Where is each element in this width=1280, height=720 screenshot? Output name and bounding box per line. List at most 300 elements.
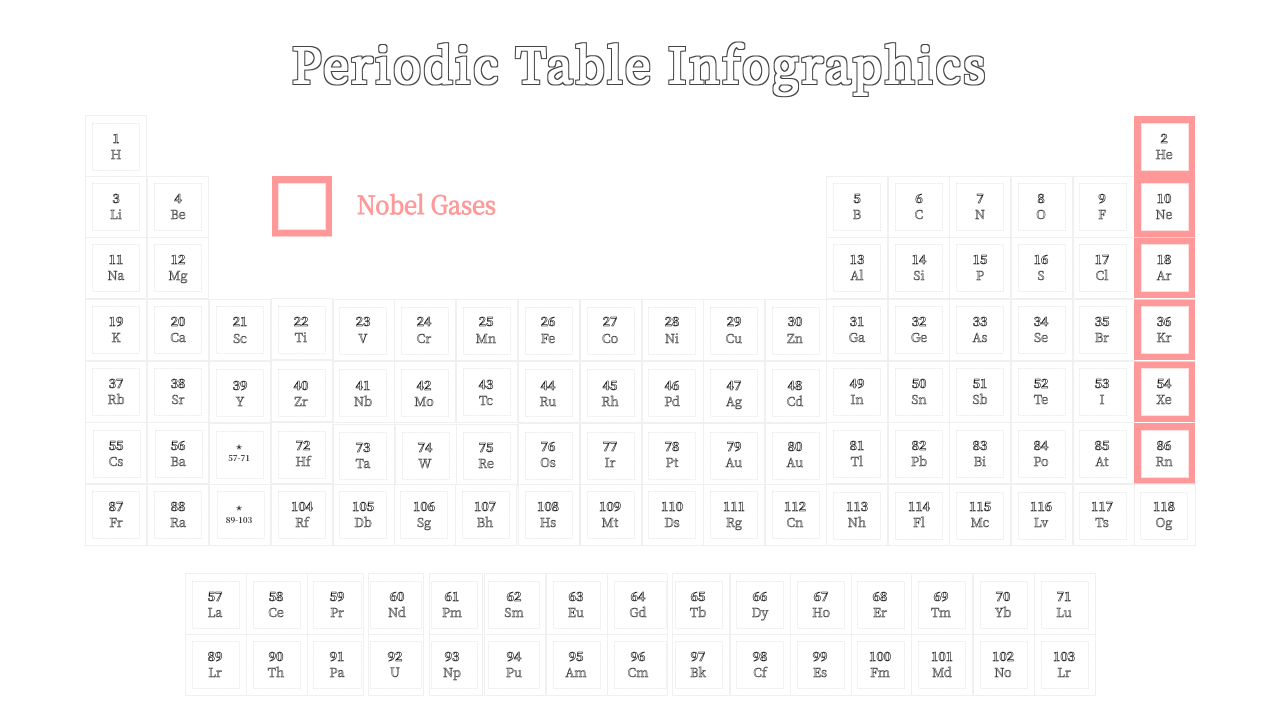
element: Th: Th xyxy=(268,663,284,681)
element: Eu xyxy=(546,574,608,634)
element: Sb: Sb xyxy=(973,390,988,408)
element: He: He xyxy=(1155,145,1173,163)
element: Yb: 70 xyxy=(996,587,1010,605)
element: W: W xyxy=(418,454,432,472)
element: Ga: 31 xyxy=(850,312,864,330)
element: Pa: 91 xyxy=(330,647,344,665)
element: Pb: Pb xyxy=(911,452,927,470)
actinide placeholder cell: * xyxy=(237,502,242,517)
element: Pm xyxy=(430,574,482,634)
element: K: K xyxy=(111,328,121,346)
element: H: H xyxy=(111,145,121,163)
element: Er: Er xyxy=(873,603,887,621)
element: Cr: Cr xyxy=(417,329,431,347)
element: I: 53 xyxy=(1095,374,1109,392)
element: F: F xyxy=(1098,205,1106,223)
element: Zr xyxy=(272,360,332,422)
element: Ts: 117 xyxy=(1091,497,1113,515)
element: Ce: Ce xyxy=(268,603,284,621)
element: Gd xyxy=(608,574,668,634)
element: F: 9 xyxy=(1098,189,1106,207)
element: Md: 101 xyxy=(931,647,953,665)
element: Au (80) xyxy=(766,424,826,484)
element: Fe xyxy=(518,300,580,360)
element: As xyxy=(950,300,1010,360)
element: Bh: Bh xyxy=(477,513,493,531)
element: Y: Y xyxy=(236,392,245,410)
element: At xyxy=(1074,422,1134,484)
element: Br: Br xyxy=(1095,328,1109,346)
element: Xe: 54 xyxy=(1157,374,1172,392)
element: In: 49 xyxy=(850,374,864,392)
element: Db: 105 xyxy=(352,497,374,515)
element: Li: Li xyxy=(110,205,122,223)
element: Ir: Ir xyxy=(605,453,616,471)
element: Md: Md xyxy=(932,663,952,681)
element: No: No xyxy=(994,663,1012,681)
element: Ni: Ni xyxy=(665,329,679,347)
element: No: 102 xyxy=(992,647,1014,665)
element: Ti xyxy=(272,298,332,360)
element: Rg: Rg xyxy=(726,513,742,531)
element: Tb xyxy=(672,574,730,634)
element: Cs: 55 xyxy=(109,436,123,454)
legend: noble gases xyxy=(272,176,496,236)
element: B: 5 xyxy=(853,189,861,207)
element: Te xyxy=(1012,362,1072,422)
element: Rn: 86 xyxy=(1157,436,1171,454)
element: Ra: 88 xyxy=(171,497,185,515)
element: Cu: Cu xyxy=(726,329,742,347)
element: Pt: Pt xyxy=(666,453,679,471)
element: Sm: Sm xyxy=(504,603,524,621)
element: Os: Os xyxy=(540,453,556,471)
element: Te: 52 xyxy=(1034,374,1048,392)
element: Rf xyxy=(272,484,332,546)
element: Cf: 98 xyxy=(753,647,767,665)
element: Ti: Ti xyxy=(295,328,307,346)
element: Ra xyxy=(148,484,208,546)
element: Ag: Ag xyxy=(726,392,742,410)
element: Re: 75 xyxy=(479,438,493,456)
element: Ts: Ts xyxy=(1095,513,1109,531)
element: Es: 99 xyxy=(813,647,827,665)
element: Ge: 32 xyxy=(912,312,926,330)
element: Cn: 112 xyxy=(784,497,806,515)
element: Cs xyxy=(86,422,146,484)
element: Mg xyxy=(148,238,208,298)
element: Nh xyxy=(826,484,888,546)
element: Te: Te xyxy=(1034,390,1048,408)
element: W: 74 xyxy=(418,438,433,456)
element: Lu xyxy=(1034,574,1096,634)
element: F xyxy=(1074,176,1134,238)
element: Mt: 109 xyxy=(599,497,621,515)
element: Na: Na xyxy=(108,266,124,284)
element: Ru: 44 xyxy=(541,376,556,394)
element: Pt: 78 xyxy=(665,437,679,455)
element: Na xyxy=(86,238,146,298)
element: Br: 35 xyxy=(1095,312,1109,330)
element: Lu: 71 xyxy=(1057,587,1071,605)
element: Pr xyxy=(308,574,364,634)
element: Np: 93 xyxy=(445,647,459,665)
element: Mo: 42 xyxy=(417,376,431,394)
element: Rh: Rh xyxy=(601,392,619,410)
element: Hf xyxy=(272,422,332,484)
element: Ar xyxy=(1134,238,1195,298)
element: Pb: 82 xyxy=(912,436,926,454)
element: Ne: 10 xyxy=(1157,189,1171,207)
element: Ru: Ru xyxy=(540,392,556,410)
element: Os: 76 xyxy=(541,437,555,455)
element: B xyxy=(826,176,888,238)
element: Fe: Fe xyxy=(541,329,555,347)
element: Cn xyxy=(766,484,826,546)
element: Cl: Cl xyxy=(1096,266,1108,284)
element: Cu: 29 xyxy=(727,312,741,330)
element: Pd: Pd xyxy=(664,392,680,410)
element: Xe: Xe xyxy=(1156,390,1172,408)
element: Am: 95 xyxy=(569,647,583,665)
element: Ts xyxy=(1074,484,1134,546)
element: Ar: Ar xyxy=(1157,266,1172,284)
element: Tl: 81 xyxy=(850,436,864,454)
element: Au xyxy=(704,424,764,484)
element: Au (80): Au xyxy=(787,453,803,471)
element: N xyxy=(950,176,1010,238)
element: Th: 90 xyxy=(269,647,283,665)
element: Lv: Lv xyxy=(1034,513,1048,531)
element: Hf: Hf xyxy=(295,452,312,470)
element: Sn: Sn xyxy=(911,390,927,408)
element: N: 7 xyxy=(976,189,984,207)
element: Fl: Fl xyxy=(913,513,925,531)
element: Ar: 18 xyxy=(1157,250,1171,268)
element: He xyxy=(1134,116,1195,176)
element: Ta: 73 xyxy=(356,438,370,456)
element: Sc: 21 xyxy=(233,312,247,330)
element: Fm: 100 xyxy=(869,647,891,665)
element: Si xyxy=(888,238,950,298)
element: Th xyxy=(246,634,308,696)
element: Tm: 69 xyxy=(934,587,948,605)
element: Hf: 72 xyxy=(296,436,310,454)
element: U: 92 xyxy=(388,647,402,665)
element: Mo: Mo xyxy=(414,392,434,410)
element: Pa xyxy=(308,634,364,696)
element: Re: Re xyxy=(478,454,494,472)
element: Hs: 108 xyxy=(537,497,559,515)
element: Tl: Tl xyxy=(851,452,863,470)
element: Cn: Cn xyxy=(787,513,803,531)
element: Fr: 87 xyxy=(109,497,123,515)
element: Sc: Sc xyxy=(233,329,247,347)
element: Rf: Rf xyxy=(295,513,310,531)
element: At: At xyxy=(1095,452,1109,470)
element: Cf: Cf xyxy=(753,663,768,681)
element: I xyxy=(1074,362,1134,422)
element: Cm xyxy=(608,634,668,696)
element: Co xyxy=(580,300,642,360)
element: Bi: 83 xyxy=(973,436,987,454)
element: Ge xyxy=(888,300,950,360)
element: Bk xyxy=(672,634,730,696)
element: Nh: 113 xyxy=(846,497,868,515)
element: Ds xyxy=(642,484,704,546)
element: S xyxy=(1012,238,1072,298)
element: Zn xyxy=(766,300,826,360)
element: Ti: 22 xyxy=(294,312,308,330)
element: Dy: Dy xyxy=(752,603,768,621)
element: Pm: 61 xyxy=(445,587,459,605)
element: Sr: 38 xyxy=(171,374,185,392)
element: Ir xyxy=(580,424,642,484)
element: Rg xyxy=(704,484,764,546)
element: Se: Se xyxy=(1034,328,1048,346)
element: Kr: Kr xyxy=(1157,328,1172,346)
element: La: 57 xyxy=(208,587,222,605)
element: Tm xyxy=(912,574,972,634)
element: K xyxy=(86,300,146,360)
element: Sr xyxy=(148,362,208,422)
element: Np: Np xyxy=(443,663,461,681)
element: Nb xyxy=(334,362,394,422)
element: Al: Al xyxy=(850,266,864,284)
element: Rg: 111 xyxy=(723,497,745,515)
element: Rf: 104 xyxy=(291,497,314,515)
element: C xyxy=(888,176,950,238)
element: Tb: 65 xyxy=(691,587,705,605)
element: Og xyxy=(1134,484,1196,546)
element: C: C xyxy=(915,205,923,223)
element: Tl xyxy=(826,422,888,484)
element: Ru xyxy=(518,362,580,422)
element: Pd xyxy=(642,362,704,422)
element: Al: 13 xyxy=(850,250,864,268)
element: Ce: 58 xyxy=(269,587,283,605)
element: Er: 68 xyxy=(873,587,887,605)
element: Eu: Eu xyxy=(568,603,584,621)
element: Rb: 37 xyxy=(109,374,123,392)
main periodic table xyxy=(86,116,1196,546)
element: Ga xyxy=(826,300,888,360)
element: Yb: Yb xyxy=(995,603,1011,621)
element: O xyxy=(1012,176,1072,238)
element: Fm: Fm xyxy=(870,663,890,681)
element: Pu: Pu xyxy=(506,663,522,681)
element: Ta xyxy=(334,424,394,486)
element: Gd: 64 xyxy=(631,587,646,605)
element: P xyxy=(950,238,1010,298)
element: Pu: 94 xyxy=(507,647,522,665)
element: Sc xyxy=(210,300,270,360)
element: P: P xyxy=(976,266,984,284)
element: Cs: Cs xyxy=(109,452,123,470)
element: S: S xyxy=(1037,266,1045,284)
element: Si: 14 xyxy=(912,250,927,268)
element: As: 33 xyxy=(973,312,987,330)
element: Ho xyxy=(790,574,852,634)
element: Fr xyxy=(86,484,146,546)
element: Rh: 45 xyxy=(603,376,617,394)
element: Cr: 24 xyxy=(417,312,432,330)
element: Lr xyxy=(1034,634,1096,696)
element: Ni: 28 xyxy=(665,312,679,330)
element: Co: Co xyxy=(602,329,618,347)
element: Po: Po xyxy=(1033,452,1049,470)
element: Be: 4 xyxy=(174,189,182,207)
element: Zr: Zr xyxy=(294,392,308,410)
element: Bh: 107 xyxy=(474,497,496,515)
element: No xyxy=(974,634,1034,696)
element: Se xyxy=(1012,300,1072,360)
legend label: Nobel Gases xyxy=(357,186,496,222)
element: Xe xyxy=(1134,362,1195,422)
element: Lv: 116 xyxy=(1030,497,1052,515)
element: B: B xyxy=(853,205,861,223)
title: Periodic Table Infographics xyxy=(292,28,988,97)
element: Cm: 96 xyxy=(631,647,645,665)
element: Ne: Ne xyxy=(1156,205,1172,223)
element: In: In xyxy=(850,390,864,408)
element: Y: 39 xyxy=(233,376,247,394)
element: Dy xyxy=(730,574,792,634)
element: Mg: 12 xyxy=(171,250,185,268)
element: Pm: Pm xyxy=(442,603,462,621)
element: Ca: 20 xyxy=(171,312,185,330)
element: Mc: Mc xyxy=(971,513,990,531)
element: Nh: Nh xyxy=(848,513,866,531)
element: Hs xyxy=(518,484,580,546)
element: Ca xyxy=(148,300,208,360)
element: Fl: 114 xyxy=(908,497,931,515)
element: Ho: Ho xyxy=(812,603,830,621)
element: Db xyxy=(334,484,394,546)
element: Ag xyxy=(704,362,764,422)
element: Mt: Mt xyxy=(602,513,619,531)
element: Re xyxy=(456,424,518,486)
element: V xyxy=(334,300,394,360)
legend swatch xyxy=(272,176,332,236)
element: S: 16 xyxy=(1034,250,1048,268)
element: Ac (89): Lr xyxy=(208,663,222,681)
element: Ne xyxy=(1134,176,1195,237)
element: Yb xyxy=(974,574,1034,634)
element: Li: 3 xyxy=(112,189,120,207)
element: Bk: 97 xyxy=(691,647,705,665)
element: Po: 84 xyxy=(1034,436,1049,454)
element: Fl xyxy=(888,484,950,546)
element: Mg: Mg xyxy=(168,266,188,284)
element: Mn: 25 xyxy=(479,312,493,330)
element: Sb: 51 xyxy=(973,374,987,392)
element: Np xyxy=(430,634,482,696)
element: C: 6 xyxy=(915,189,923,207)
element: Tc xyxy=(456,362,518,422)
element: Pu xyxy=(484,634,546,696)
element: La xyxy=(186,574,246,634)
element: Ho: 67 xyxy=(814,587,828,605)
element: Cu xyxy=(704,300,764,360)
element: La: La xyxy=(208,603,222,621)
element: Bk: Bk xyxy=(690,663,706,681)
element: Es xyxy=(790,634,852,696)
element: Cl: 17 xyxy=(1095,250,1109,268)
element: He: 2 xyxy=(1160,129,1168,147)
element: Sn: 50 xyxy=(912,374,926,392)
element: Au: 79 xyxy=(727,437,741,455)
element: Au (80): 80 xyxy=(788,437,802,455)
element: Rb xyxy=(86,362,146,422)
element: Ba: 56 xyxy=(171,436,185,454)
lanthanide and actinide table xyxy=(186,574,1096,696)
element: Fe: 26 xyxy=(541,312,555,330)
element: Mo xyxy=(394,362,456,422)
element: Fm xyxy=(852,634,912,696)
element: Sm: 62 xyxy=(507,587,521,605)
element: Ds: 110 xyxy=(661,497,683,515)
element: At: 85 xyxy=(1095,436,1109,454)
element: O: 8 xyxy=(1037,189,1045,207)
element: Ce xyxy=(246,574,308,634)
element: Nb: 41 xyxy=(356,376,370,394)
element: Cl xyxy=(1074,238,1134,298)
element: Ca: Ca xyxy=(170,328,186,346)
element: Os xyxy=(518,424,580,484)
element: Li xyxy=(86,176,146,238)
element: Sb xyxy=(950,362,1010,422)
element: Rn: Rn xyxy=(1155,452,1173,470)
element: Er xyxy=(852,574,912,634)
element: Au: Au xyxy=(726,453,742,471)
element: Nb: Nb xyxy=(354,392,372,410)
element: Fr: Fr xyxy=(109,513,123,531)
element: Nd: 60 xyxy=(390,587,404,605)
element: Ac (89) xyxy=(186,634,246,696)
element: Kr xyxy=(1134,300,1195,360)
element: Mn: Mn xyxy=(476,329,496,347)
element: H xyxy=(86,116,146,176)
element: Nd xyxy=(368,574,424,634)
element: Cd xyxy=(766,362,826,422)
element: Sn xyxy=(888,362,950,422)
element: Be xyxy=(148,176,208,238)
element: Cd: 48 xyxy=(788,376,802,394)
element: Mc: 115 xyxy=(969,497,991,515)
element: K: 19 xyxy=(109,312,123,330)
element: Db: Db xyxy=(354,513,372,531)
element: Rh xyxy=(580,362,642,422)
element: Tc: 43 xyxy=(479,375,493,393)
element: Mn xyxy=(456,300,518,360)
element: Bh xyxy=(456,484,516,546)
element: P: 15 xyxy=(973,250,987,268)
element: Mt xyxy=(580,484,642,546)
element: As: As xyxy=(973,328,988,346)
element: W xyxy=(396,424,456,486)
element: N: N xyxy=(975,205,985,223)
element: Sr: Sr xyxy=(172,390,185,408)
element: Sm xyxy=(484,574,546,634)
element: Na: 11 xyxy=(109,250,123,268)
element: Ir: 77 xyxy=(603,437,617,455)
element: Ni xyxy=(642,300,704,360)
element: U xyxy=(368,634,424,696)
element: Gd: Gd xyxy=(629,603,647,621)
element: Rb: Rb xyxy=(108,390,124,408)
element: Zn: Zn xyxy=(787,329,803,347)
